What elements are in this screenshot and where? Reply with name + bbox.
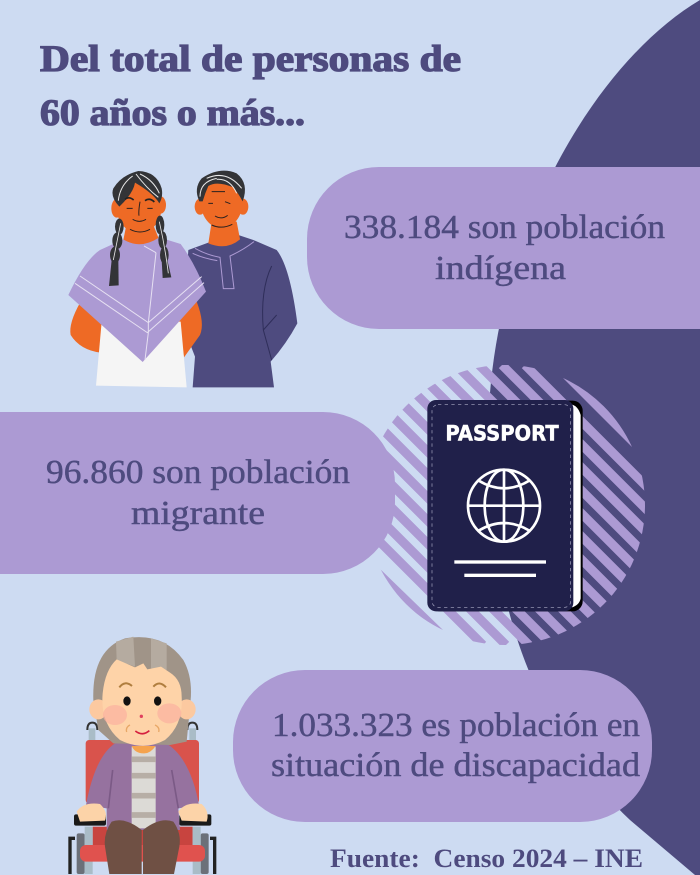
title: [40, 39, 461, 134]
panel: disability population: [233, 670, 652, 822]
wheelchair: [70, 723, 215, 874]
passport label: PASSPORT: [445, 422, 559, 447]
panel: indigenous population: indígena: [435, 250, 566, 287]
ears: [89, 699, 196, 719]
illustration: older woman in wheelchair: [70, 637, 215, 874]
woman: [68, 171, 206, 387]
title: Del total de personas de: [40, 39, 461, 80]
panel: indigenous population: 338.184 son población: [344, 209, 665, 246]
icon: striped circle: [379, 365, 645, 645]
panel: disability population: situación de discapacidad: [271, 747, 640, 784]
illustration: indigenous couple: [68, 171, 297, 387]
title: 60 años o más...: [40, 93, 305, 134]
panel: disability population: 1.033.323 es población en: [272, 707, 640, 744]
panel: migrant population: migrante: [131, 495, 265, 532]
icon: passport: [427, 400, 583, 611]
dark background shape: [488, 0, 700, 875]
panel: migrant population: [0, 412, 395, 574]
panel: migrant population: 96.860 son población: [46, 454, 350, 491]
man: [183, 171, 297, 387]
hands: [74, 804, 211, 826]
panel: indigenous population: [307, 167, 700, 329]
legs: [105, 820, 180, 874]
striped top: [132, 746, 156, 828]
hair: [93, 637, 191, 745]
globe: [468, 470, 540, 542]
face: [102, 659, 182, 746]
cardigan: [86, 743, 199, 830]
source: Fuente: Censo 2024 – INE: [330, 844, 643, 873]
passport lines: [454, 560, 546, 577]
